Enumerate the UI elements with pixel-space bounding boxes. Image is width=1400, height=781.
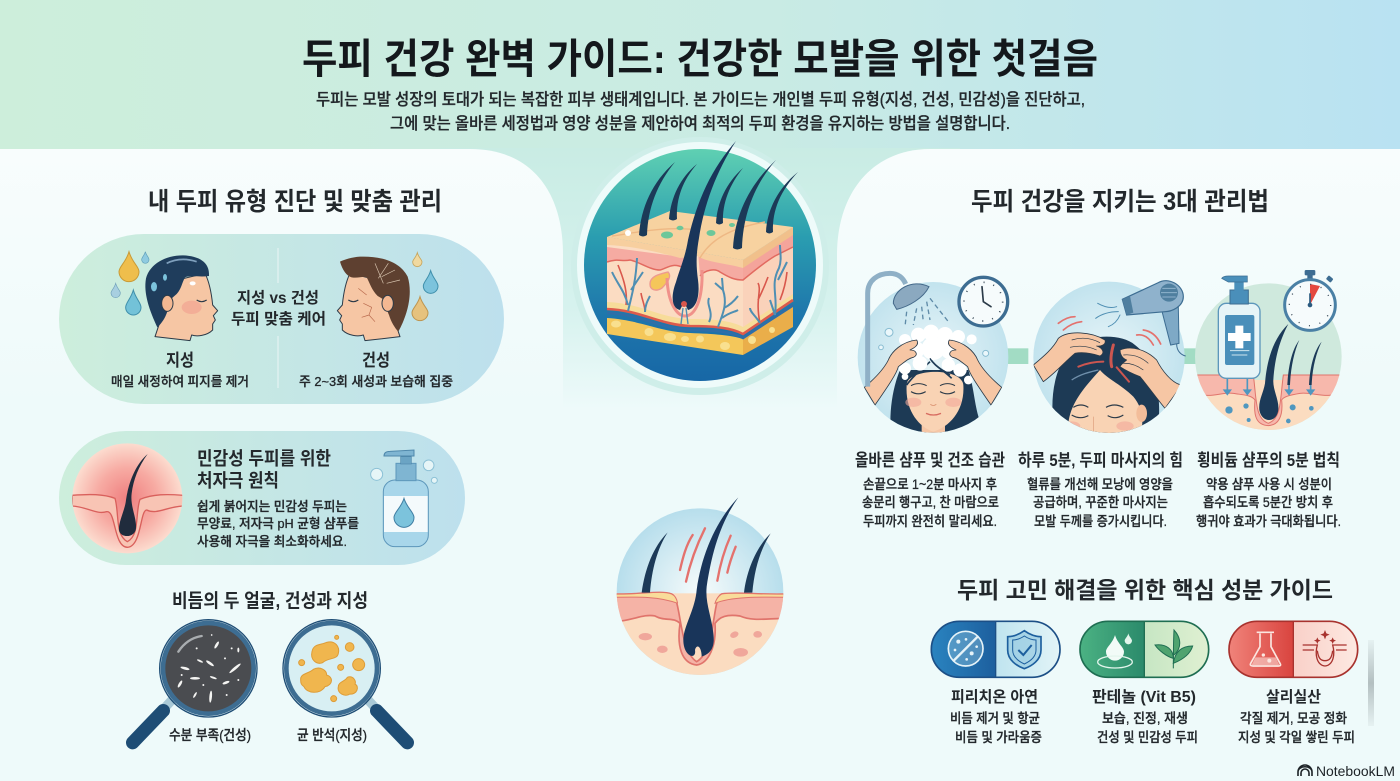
panel: dandruff types — [133, 590, 407, 743]
label: dry dandruff: 수분 부족(건성) — [169, 727, 251, 743]
text: medicated shampoo: 흡수되도록 5분간 방치 후 — [1203, 494, 1333, 510]
text: dry scalp: 건성 — [362, 351, 390, 370]
panel: oily vs dry scalp — [59, 234, 504, 404]
icon: dry head with droplets — [337, 253, 438, 341]
intro text: 두피는 모발 성장의 토대가 되는 복잡한 피부 생태계입니다. 본 가이드는 개인별 두피 유형(지성, 건성, 민감성)을 진단하고, — [316, 90, 1085, 109]
label: oily dandruff: 균 반석(지성) — [297, 727, 367, 743]
panel: sensitive scalp — [59, 431, 465, 565]
text: sensitive scalp description: 쉽게 붉어지는 민감성 두피는 — [197, 499, 347, 514]
text: sensitive scalp title: 처자극 원칙 — [197, 470, 279, 491]
intro text: 그에 맞는 올바른 세정법과 영양 성분을 제안하여 최적의 두피 환경을 유지하는 방법을 설명합니다. — [390, 114, 1010, 133]
text: medicated shampoo: 행귀야 효과가 극대화됩니다. — [1196, 514, 1341, 529]
icon: magnifier fungal blobs — [283, 620, 407, 743]
text: salicylic acid: 지성 및 각일 쌓린 두피 — [1238, 730, 1355, 745]
icon: pump bottle — [371, 450, 437, 547]
text: panthenol: 판테놀 (Vit B5) — [1092, 688, 1196, 706]
pink dermis — [607, 247, 690, 270]
text: massage: 공급하며, 꾸준한 마사지는 — [1033, 495, 1168, 510]
capsule: pyrithione zinc — [931, 621, 1060, 677]
icon: irritated follicle — [72, 443, 183, 553]
text: massage: 혈류를 개선해 모낭에 영양을 — [1027, 476, 1173, 492]
connectors — [1002, 348, 1198, 364]
intro text — [316, 90, 1085, 133]
fat layer — [607, 318, 743, 355]
icon: magnifier dry flakes — [133, 620, 257, 743]
text: massage: 하루 5분, 두피 마사지의 힘 — [1018, 451, 1183, 470]
text: pyrithione zinc — [950, 688, 1042, 745]
text: panthenol — [1092, 688, 1198, 745]
icon: shampoo and drying — [858, 273, 1008, 440]
text: panthenol: 보습, 진정, 재생 — [1102, 711, 1188, 726]
text: shampoo habit: 올바른 샴푸 및 건조 습관 — [855, 451, 1005, 470]
text: pyrithione zinc: 비듬 제거 및 항균 — [950, 711, 1040, 726]
text: shampoo habit: 손끝으로 1~2분 마사지 후 — [863, 477, 997, 492]
text: medicated shampoo: 횡비듐 샴푸의 5분 법칙 — [1197, 451, 1340, 470]
left and right skin faces — [607, 237, 743, 334]
label: oily vs dry title — [231, 289, 326, 328]
panel: ingredient capsules — [931, 621, 1358, 745]
text: sensitive scalp description — [197, 499, 359, 549]
capsule: salicylic acid — [1229, 621, 1358, 677]
text: sensitive scalp description: 사용해 자극을 최소화하세요. — [197, 534, 347, 549]
text: dry scalp: 주 2~3회 새성과 보습해 집중 — [299, 374, 453, 389]
hairs — [639, 141, 798, 310]
heading: scalp type diagnosis: 내 두피 유형 진단 및 맞춤 관리 — [148, 188, 442, 216]
logo: NotebookLM: NotebookLM — [1316, 763, 1395, 779]
gland and follicle sac — [650, 272, 670, 290]
text: sensitive scalp title: 민감성 두피를 위한 — [197, 448, 331, 469]
icon: oily head with droplets — [111, 252, 218, 341]
text: pyrithione zinc: 피리치온 아연 — [951, 688, 1038, 706]
text: oily scalp — [111, 351, 249, 389]
capsule: panthenol — [1080, 621, 1209, 677]
title: 두피 건강 완벽 가이드: 건강한 모발을 위한 첫걸음 — [302, 36, 1098, 82]
panel: three care methods — [855, 270, 1347, 529]
text: oily scalp: 지성 — [166, 351, 194, 370]
text: salicylic acid — [1238, 688, 1355, 745]
heading: dandruff: 비듬의 두 얼굴, 건성과 지성 — [172, 590, 368, 612]
text: pyrithione zinc: 비듬 및 가라움증 — [955, 730, 1042, 745]
text: medicated shampoo — [1196, 451, 1341, 529]
text: massage — [1018, 451, 1183, 529]
text: sensitive scalp title — [197, 448, 331, 491]
text: dry scalp — [299, 351, 453, 389]
heading: three care methods: 두피 건강을 지키는 3대 관리법 — [971, 188, 1269, 216]
illustration: hair follicle irritation — [613, 497, 787, 677]
text: shampoo habit — [855, 451, 1005, 529]
icon: scalp massage — [1033, 281, 1186, 435]
illustration: scalp cross-section block — [571, 137, 829, 395]
text: shampoo habit: 두피까지 완전히 말리세요. — [863, 514, 997, 529]
text: salicylic acid: 각질 제거, 모공 정화 — [1240, 711, 1348, 726]
text: sensitive scalp description: 무양료, 저자극 pH 균형 샴푸를 — [197, 516, 359, 531]
text: oily scalp: 매일 새정하여 피지를 제거 — [111, 374, 249, 389]
text: medicated shampoo: 약용 샴푸 사용 시 성분이 — [1206, 477, 1332, 492]
text: shampoo habit: 송문리 행구고, 찬 마람으로 — [862, 495, 999, 510]
vessels — [618, 265, 787, 323]
heading: ingredient guide: 두피 고민 해결을 위한 핵심 성분 가이드 — [957, 577, 1333, 603]
text: salicylic acid: 살리실산 — [1266, 688, 1321, 706]
text: massage: 모발 두께를 증가시킵니다. — [1034, 514, 1167, 529]
text: panthenol: 건성 및 민감성 두피 — [1097, 730, 1198, 745]
label: oily vs dry title: 두피 맞춤 케어 — [231, 310, 326, 328]
icon: medicated shampoo — [1193, 270, 1347, 433]
label: oily vs dry title: 지성 vs 건성 — [237, 289, 319, 307]
